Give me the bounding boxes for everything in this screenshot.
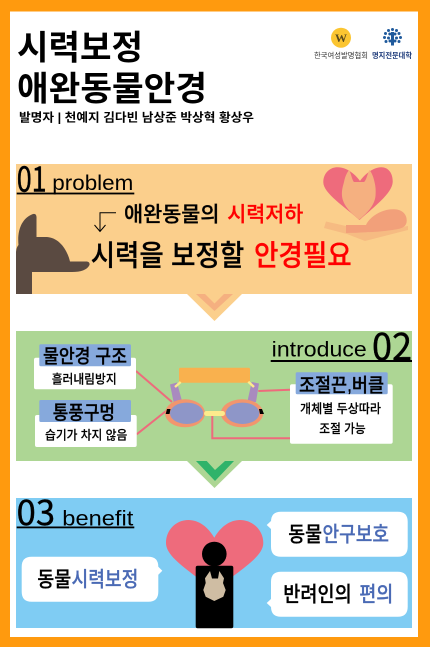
- panel 1 background with pointer: [16, 164, 412, 321]
- title: 애완동물안경: [17, 70, 207, 108]
- logo: Korea women inventors association: W: [335, 31, 347, 45]
- inventors line: 발명자 | 천예지 김다빈 남상준 박상혁 황상우: [19, 110, 254, 124]
- section name and number: [271, 317, 412, 371]
- panel 3 background: [16, 498, 412, 628]
- illustration: heart: [166, 520, 263, 592]
- panel: introduce: [16, 317, 412, 488]
- text: glasses needed: [91, 240, 352, 272]
- speech bubble: vision correction: 동물: [37, 569, 71, 592]
- callout: adjustable strap and buckle: [290, 372, 393, 444]
- logo: Myongji college: 명지전문대학: [372, 50, 412, 60]
- section number and name: 03: [17, 486, 55, 535]
- section number and name: 01: [17, 152, 47, 202]
- callout: goggle structure: 물안경 구조: [43, 346, 127, 368]
- speech bubble: vision correction: 시력보정: [72, 569, 138, 592]
- speech bubble: owner convenience: 반려인의: [283, 584, 352, 607]
- panel 2 background with pointer: [16, 331, 412, 488]
- logo: Korea women inventors association: [314, 28, 368, 60]
- text: decline in pet eyesight: 애완동물의: [124, 204, 220, 226]
- callout: vent hole: 통풍구멍: [53, 402, 115, 424]
- logo: Korea women inventors association: 한국여성발명협회: [314, 50, 368, 60]
- callout: goggle structure: [34, 344, 136, 389]
- callout: adjustable strap and buckle: 개체별 두상따라: [300, 402, 381, 416]
- callout: vent hole: 습기가 차지 않음: [45, 428, 127, 442]
- section number and name: [17, 486, 134, 535]
- speech bubble: owner convenience: 편의: [359, 584, 393, 607]
- callout: adjustable strap and buckle: 조절끈,버클: [299, 374, 384, 396]
- panel: benefit: [16, 486, 412, 628]
- text: glasses needed: 안경필요: [254, 240, 352, 272]
- text: glasses needed: 시력을 보정할: [91, 240, 244, 272]
- arrow: [94, 213, 116, 232]
- title: [17, 30, 207, 108]
- section number and name: problem: [52, 172, 133, 195]
- speech bubble: vision correction: [22, 557, 162, 602]
- panel: problem: [16, 152, 412, 321]
- section name and number: 02: [372, 317, 412, 371]
- icon: heart with pet and hand: [323, 167, 408, 241]
- section number and name: benefit: [62, 508, 133, 530]
- connector lines: [136, 371, 290, 438]
- inner chevron: [196, 461, 234, 481]
- section name and number: introduce: [272, 338, 367, 362]
- section number and name: [17, 152, 134, 202]
- text: decline in pet eyesight: [124, 204, 303, 226]
- speech bubble: eye protection: 동물: [288, 524, 322, 547]
- callout: adjustable strap and buckle: 조절 가능: [319, 422, 366, 436]
- illustration: person holding pet: [196, 542, 233, 628]
- speech bubble: eye protection: 안구보호: [322, 524, 389, 547]
- logo: Myongji college: [372, 28, 412, 60]
- inner chevron: [196, 294, 233, 311]
- text: decline in pet eyesight: 시력저하: [227, 204, 303, 226]
- callout: goggle structure: 흘러내림방지: [52, 371, 117, 386]
- speech bubble: owner convenience: [267, 572, 408, 617]
- icon: dog silhouette: [16, 214, 90, 294]
- callout: vent hole: [35, 400, 137, 447]
- title: 시력보정: [17, 30, 143, 68]
- illustration: swim goggles: [165, 368, 264, 427]
- speech bubble: eye protection: [267, 512, 408, 557]
